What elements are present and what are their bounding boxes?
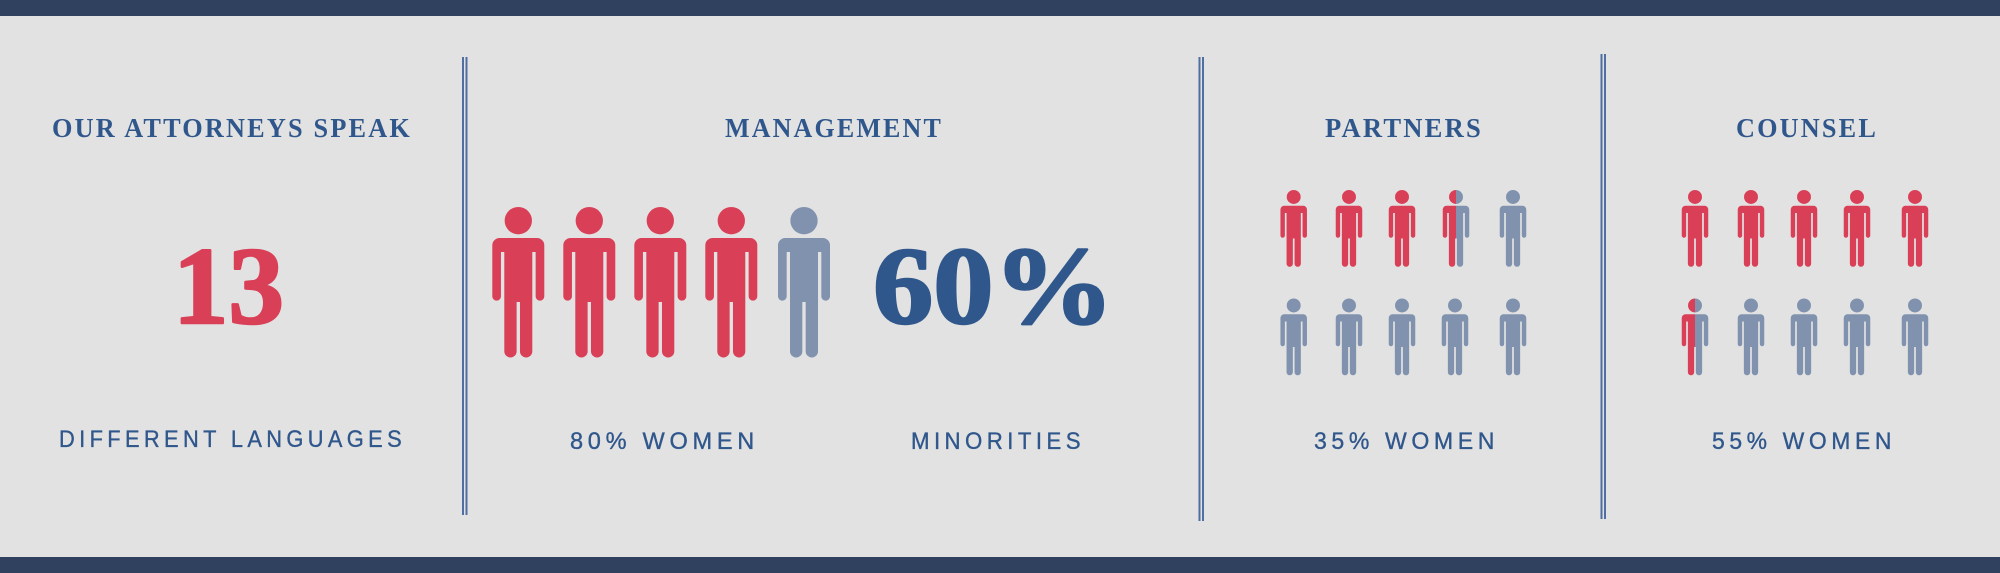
label: different languages: DIFFERENT LANGUAGES bbox=[59, 425, 406, 452]
number: 60%: 60% bbox=[873, 225, 1114, 347]
label: 80% women: 80% WOMEN bbox=[570, 427, 759, 454]
heading: our attorneys speak: OUR ATTORNEYS SPEAK bbox=[52, 112, 412, 143]
divider 3 bbox=[1600, 54, 1606, 519]
panel: partners bbox=[1280, 112, 1526, 454]
label: 55% women: 55% WOMEN bbox=[1712, 427, 1896, 454]
bottom bar bbox=[0, 557, 2000, 573]
heading: partners: PARTNERS bbox=[1325, 112, 1483, 143]
heading: counsel: COUNSEL bbox=[1736, 112, 1878, 143]
divider 1 bbox=[462, 57, 468, 515]
panel: management bbox=[492, 112, 1114, 454]
number: 13: 13 bbox=[173, 225, 284, 347]
label: minorities: MINORITIES bbox=[911, 427, 1085, 454]
panel: counsel bbox=[1682, 112, 1928, 454]
pictogram: 55% women bbox=[1682, 190, 1928, 375]
divider 2 bbox=[1198, 57, 1204, 521]
label: 35% women: 35% WOMEN bbox=[1314, 427, 1499, 454]
heading: management: MANAGEMENT bbox=[725, 112, 943, 143]
pictogram: 80% women bbox=[492, 207, 830, 357]
top bar bbox=[0, 0, 2000, 16]
panel: languages bbox=[52, 112, 412, 452]
pictogram: 35% women bbox=[1280, 190, 1526, 375]
